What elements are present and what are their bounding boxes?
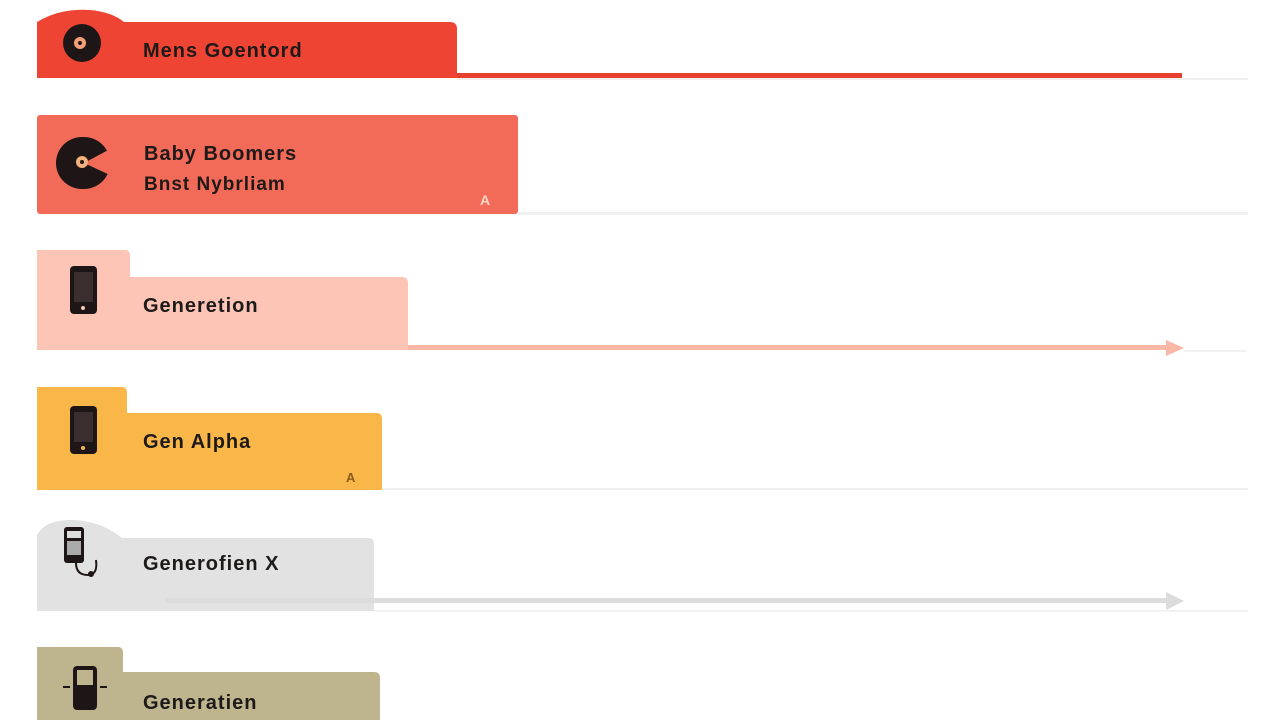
icon: mobile with cable xyxy=(64,527,96,577)
marker: A xyxy=(346,470,356,485)
label: Generofien X xyxy=(143,553,279,575)
label: Generetion xyxy=(143,295,259,317)
label: Baby Boomers xyxy=(144,143,297,165)
icon: phone xyxy=(70,406,97,454)
label: Generatien xyxy=(143,692,257,714)
sublabel: Bnst Nybrliam xyxy=(144,174,286,195)
icon: phone xyxy=(70,266,97,314)
icon: record partial xyxy=(56,137,112,189)
row 2: Baby Boomers xyxy=(37,115,1248,215)
row 4: Gen Alpha xyxy=(37,387,1248,490)
row 5: Generation X xyxy=(37,520,1248,612)
icon: record xyxy=(63,24,101,62)
marker: A xyxy=(480,192,491,208)
row 6: Generation xyxy=(37,647,380,720)
icon: flip phone xyxy=(63,666,107,710)
label: Gen Alpha xyxy=(143,431,251,453)
label: Mens Goentord xyxy=(143,40,303,62)
row 1: Mens Goentord xyxy=(37,10,1248,80)
row 3: Generation xyxy=(37,250,1246,356)
